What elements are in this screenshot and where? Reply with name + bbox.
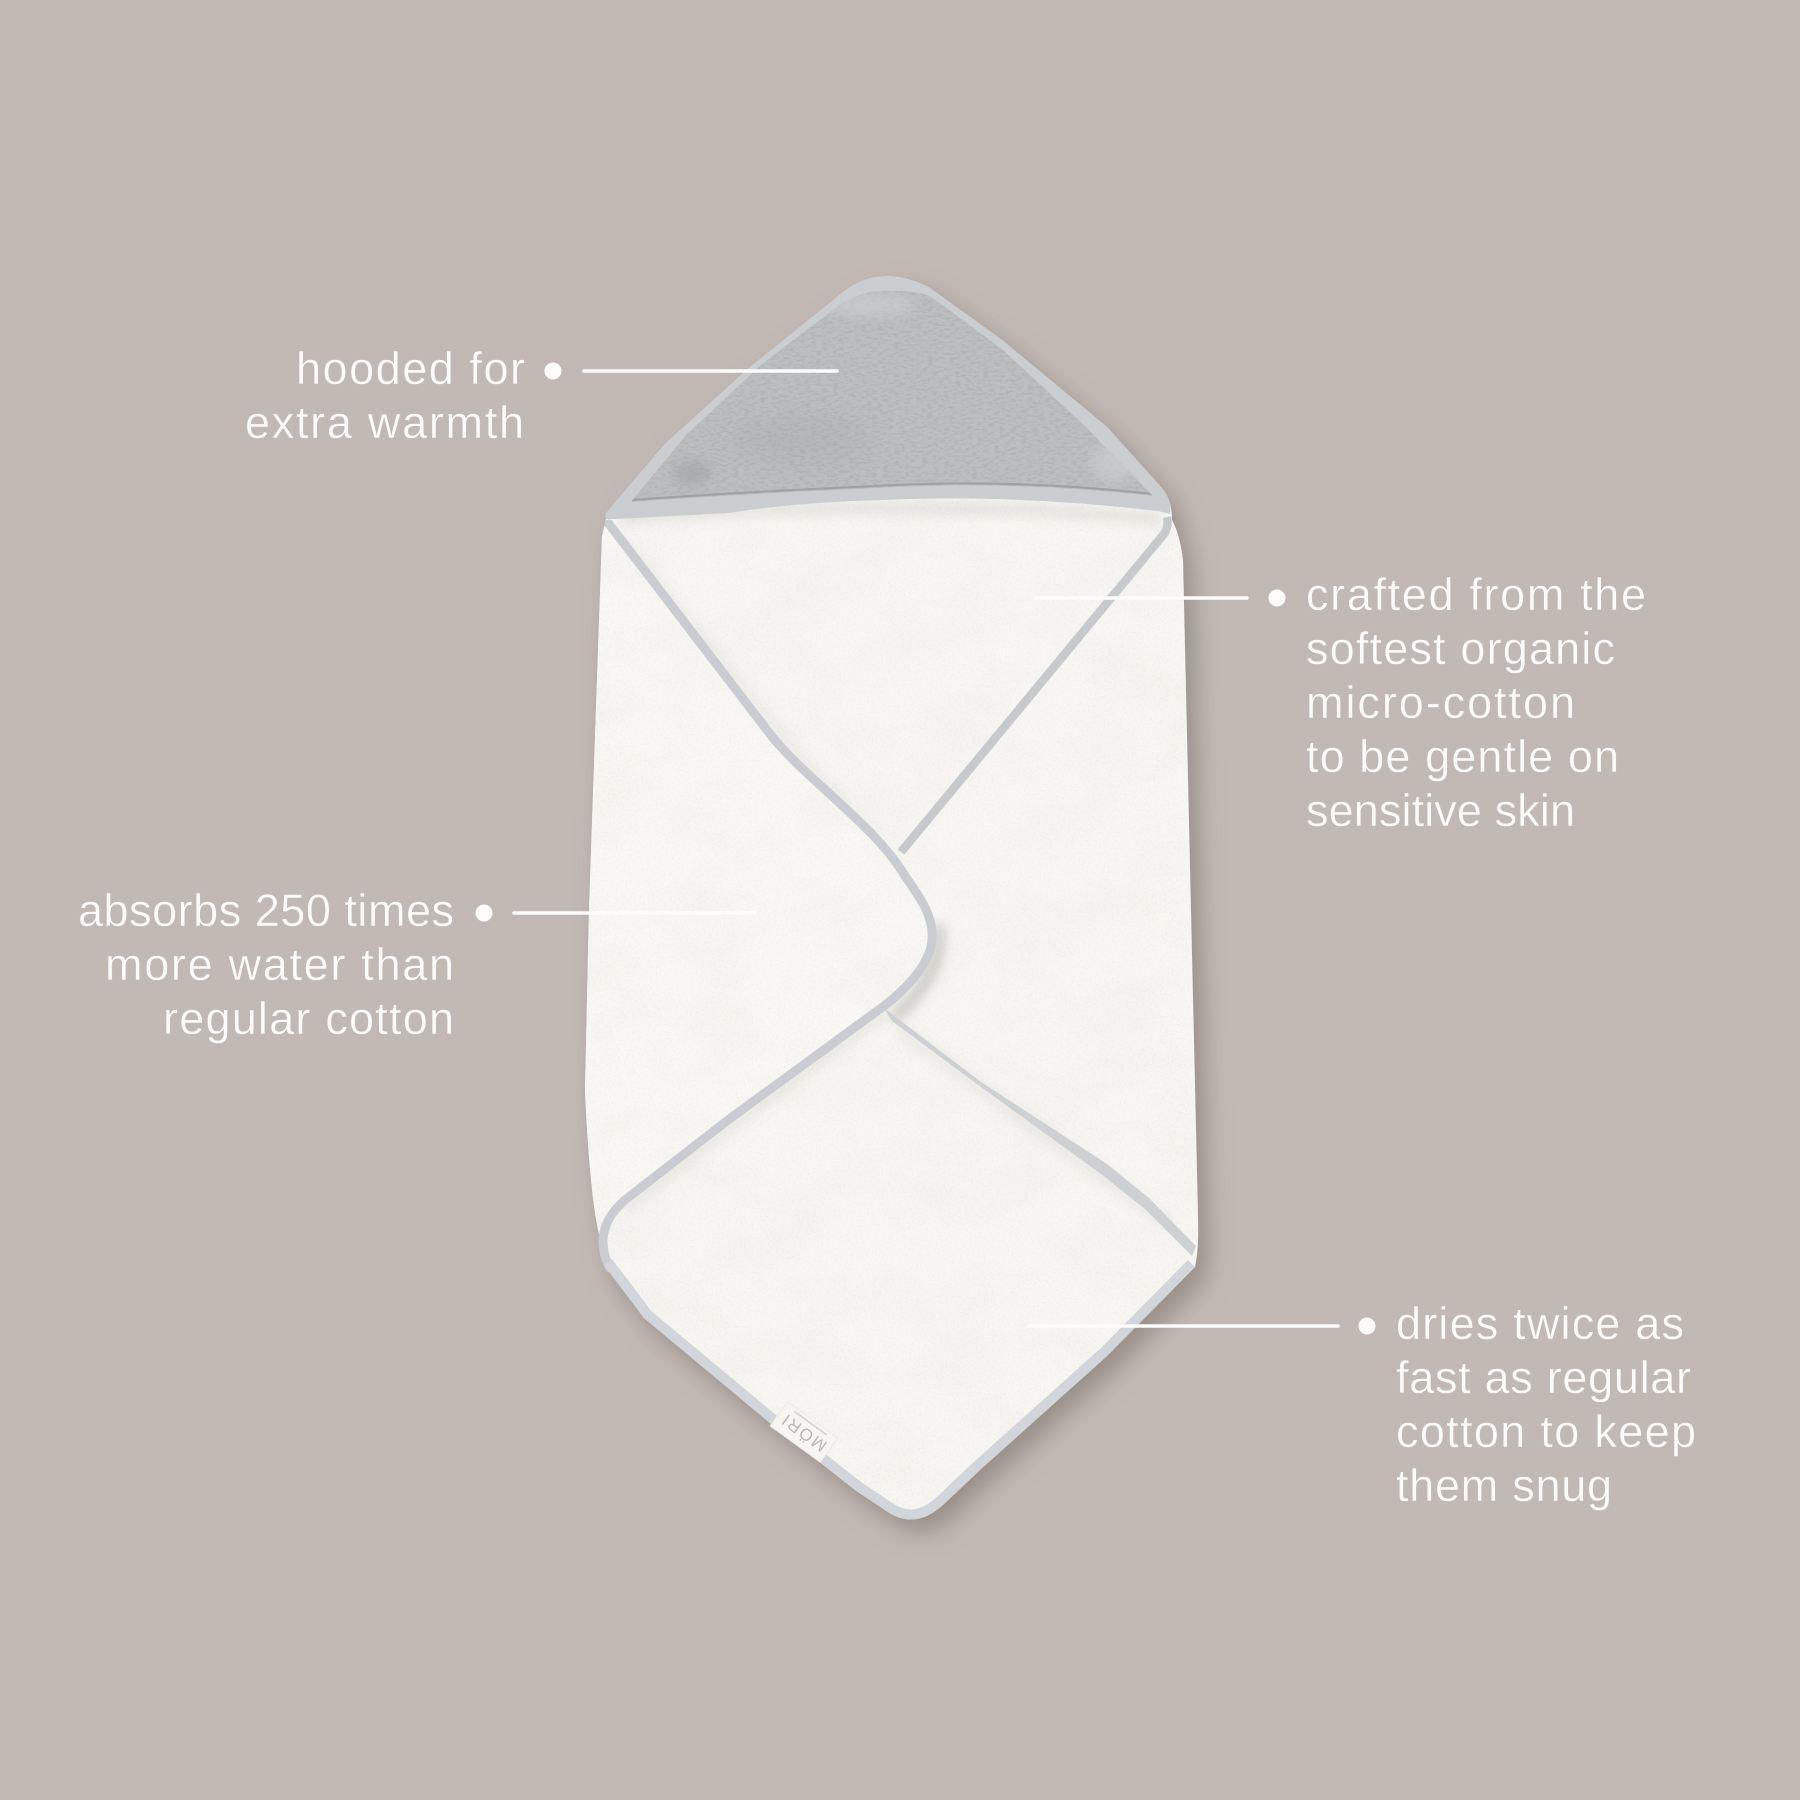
left diagonal and flap trim (603, 524, 932, 1268)
callout text: softest organic (1306, 623, 1615, 674)
callout: soft organic micro-cotton (1036, 569, 1646, 836)
callout text: fast as regular (1396, 1352, 1691, 1403)
callout text (78, 885, 454, 1044)
infographic canvas (80, 276, 1694, 1541)
bullet dot (1268, 590, 1286, 606)
callout text: more water than (105, 939, 454, 990)
callout text: absorbs 250 times (78, 885, 454, 936)
callout text (1306, 569, 1646, 836)
hood texture (632, 293, 1152, 502)
callout text (1396, 1298, 1696, 1511)
callout text: sensitive skin (1306, 785, 1575, 836)
callout text: them snug (1396, 1460, 1612, 1511)
callout text (245, 343, 525, 448)
left wrap flap (585, 524, 932, 1238)
leader line (584, 369, 837, 373)
bottom flap right trim (884, 1008, 1196, 1256)
callout text: crafted from the (1306, 569, 1646, 620)
towel body (585, 276, 1198, 1519)
woven brand label (770, 1402, 838, 1462)
hood fabric (631, 291, 1153, 502)
callout text: hooded for (296, 343, 525, 394)
callout text: regular cotton (163, 993, 454, 1044)
woven brand label: MÖRI (777, 1409, 830, 1455)
callout text: extra warmth (245, 397, 524, 448)
bullet dot (1358, 1318, 1376, 1334)
callout: absorbency (78, 885, 755, 1044)
callout text: to be gentle on (1306, 731, 1619, 782)
right diagonal trim (901, 517, 1168, 852)
bullet dot (544, 362, 562, 380)
bottom hem trim (604, 1265, 1195, 1519)
panel shadows (615, 508, 1170, 1225)
leader line (1036, 596, 1247, 600)
leader line (514, 911, 755, 915)
callout text: micro-cotton (1306, 677, 1575, 728)
bullet dot (476, 904, 492, 922)
hood trim (605, 276, 1170, 519)
callout: hood warmth (245, 343, 837, 448)
callout text: cotton to keep (1396, 1406, 1696, 1457)
hood (600, 270, 1180, 520)
terry texture (588, 504, 1198, 1504)
callout: fast drying (1029, 1298, 1696, 1511)
towel illustration (560, 260, 1220, 1540)
leader line (1029, 1324, 1338, 1328)
callout text: dries twice as (1396, 1298, 1684, 1349)
